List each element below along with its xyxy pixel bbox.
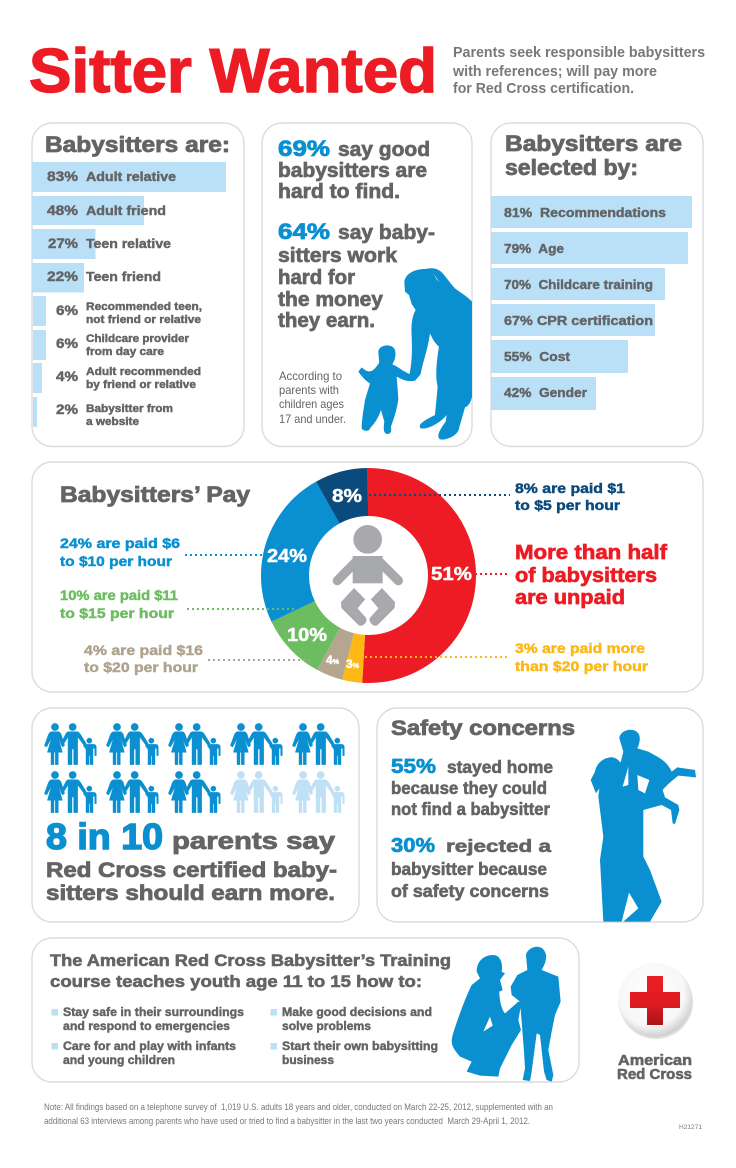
bar chart: babysitter types: not friend or relative bbox=[86, 314, 201, 326]
stat: 64 percent: they earn. bbox=[278, 310, 375, 332]
bar chart: selection criteria: 70% Childcare training bbox=[504, 277, 653, 292]
bar chart: babysitter types: 83% bbox=[47, 169, 78, 184]
subtitle: Parents seek responsible babysitters bbox=[453, 44, 705, 61]
stat: 55 percent: because they could bbox=[391, 778, 547, 798]
label: 8 percent: to $5 per hour bbox=[515, 498, 621, 513]
label: 10 percent: 10% are paid $11 bbox=[60, 588, 179, 603]
connector lines bbox=[185, 495, 510, 660]
bar chart: selection criteria: 67% CPR certification bbox=[504, 313, 653, 328]
bar chart: babysitter types bbox=[32, 162, 226, 428]
bar chart: selection criteria: 55% Cost bbox=[504, 349, 571, 364]
bar chart: babysitter types: 6% bbox=[56, 336, 78, 351]
donut labels bbox=[267, 486, 472, 671]
stat: 64 percent: 64% bbox=[278, 219, 330, 244]
note: according to parents: children ages bbox=[279, 397, 344, 411]
stat: 69 percent bbox=[278, 136, 430, 203]
label: 3 percent bbox=[515, 641, 649, 674]
stat: 69 percent: 69% bbox=[278, 136, 330, 161]
label: 10 percent bbox=[60, 588, 179, 621]
stat: 69 percent: hard to find. bbox=[278, 181, 400, 203]
label: more than half unpaid bbox=[515, 542, 667, 609]
bar chart: babysitter types: 22% bbox=[47, 269, 78, 284]
pictogram: families bbox=[44, 723, 344, 813]
stat: 30 percent: 30% bbox=[391, 835, 435, 857]
stat: 30 percent: rejected a bbox=[446, 836, 551, 856]
panel: 8 in 10 parents bbox=[32, 708, 359, 922]
bullet: good decisions: Make good decisions and bbox=[282, 1005, 432, 1019]
panel: selected by bbox=[491, 123, 703, 446]
label: 4 percent bbox=[84, 643, 204, 675]
footnote: additional 63 interviews among parents who have used or tried to find a babysitter in the last two years conducted March 29-April 1, 2012. bbox=[44, 1116, 530, 1126]
stat: 8 in 10: sitters should earn more. bbox=[46, 881, 335, 905]
heading: training course: course teaches youth age 11 to 15 how to: bbox=[50, 972, 422, 991]
donut labels: 4% bbox=[326, 653, 340, 667]
heading: training course bbox=[50, 951, 451, 991]
donut labels: 10% bbox=[287, 625, 327, 645]
stat: 55 percent bbox=[391, 756, 553, 819]
stat: 30 percent: of safety concerns bbox=[391, 881, 549, 901]
bullet: care for infants: and young children bbox=[63, 1053, 175, 1067]
job code: H21271 bbox=[679, 1124, 702, 1131]
bullet: stay safe: Stay safe in their surroundings bbox=[63, 1005, 244, 1019]
heading: selected by: selected by: bbox=[505, 155, 638, 180]
note: according to parents: 17 and under. bbox=[279, 412, 346, 426]
logo wordmark: American bbox=[618, 1052, 692, 1069]
bar chart: selection criteria: 81% Recommendations bbox=[504, 205, 666, 220]
label: 3 percent: than $20 per hour bbox=[515, 659, 649, 674]
bullet: own business: Start their own babysitting bbox=[282, 1039, 438, 1053]
stat: 64 percent: the money bbox=[278, 289, 384, 311]
bar chart: babysitter types: 6% bbox=[56, 303, 78, 318]
bar chart: selection criteria bbox=[491, 196, 692, 410]
label: 8 percent bbox=[515, 481, 626, 513]
stat: 64 percent: hard for bbox=[278, 267, 355, 289]
stat: 69 percent: babysitters are bbox=[278, 160, 427, 182]
donut chart: pay distribution bbox=[285, 492, 452, 659]
stat: 30 percent bbox=[391, 835, 551, 901]
panel: hard to find bbox=[262, 123, 472, 446]
bar chart: selection criteria: 79% Age bbox=[504, 241, 564, 256]
label: 3 percent: 3% are paid more bbox=[515, 641, 646, 656]
heading: selected by: Babysitters are bbox=[505, 131, 682, 156]
bullet: stay safe bbox=[52, 1005, 244, 1033]
heading: pay: Babysitters’ Pay bbox=[60, 482, 251, 507]
bullet: good decisions: solve problems bbox=[282, 1019, 371, 1033]
heading: selected by bbox=[505, 131, 682, 180]
bar chart: babysitter types: Recommended teen, bbox=[86, 301, 202, 313]
stat: 55 percent: 55% bbox=[391, 756, 436, 778]
label: more than half unpaid: of babysitters bbox=[515, 565, 657, 587]
bar chart: babysitter types: 4% bbox=[56, 369, 78, 384]
logo: American Red Cross bbox=[617, 963, 693, 1083]
note: according to parents: parents with bbox=[279, 383, 339, 397]
bar chart: babysitter types: Adult friend bbox=[86, 203, 166, 218]
stat: 30 percent: babysitter because bbox=[391, 859, 547, 879]
label: 24 percent: to $10 per hour bbox=[60, 554, 173, 569]
note: according to parents: According to bbox=[279, 369, 342, 383]
footnote bbox=[44, 1102, 553, 1126]
logo wordmark: Red Cross bbox=[617, 1066, 692, 1083]
stat: 64 percent bbox=[278, 219, 435, 332]
label: more than half unpaid: are unpaid bbox=[515, 587, 625, 609]
panel: safety concerns bbox=[377, 708, 703, 922]
icon: parent lifting child bbox=[591, 730, 696, 922]
footnote: Note: All findings based on a telephone survey of 1,019 U.S. adults 18 years and older, conducted on March 22-25, 2012, supplemented with an bbox=[44, 1102, 553, 1112]
bullet: stay safe: and respond to emergencies bbox=[63, 1019, 230, 1033]
bar chart: selection criteria: 42% Gender bbox=[504, 385, 587, 400]
bullet: care for infants bbox=[52, 1039, 236, 1067]
panel: training course bbox=[32, 938, 579, 1082]
label: more than half unpaid: More than half bbox=[515, 542, 667, 564]
bar chart: babysitter types: 27% bbox=[48, 236, 78, 251]
label: 4 percent: to $20 per hour bbox=[84, 660, 199, 675]
bullet: good decisions bbox=[270, 1005, 432, 1033]
panel: babysitters are bbox=[32, 123, 244, 446]
donut labels: 51% bbox=[431, 564, 472, 584]
logo button bbox=[618, 963, 693, 1039]
subtitle: with references; will pay more bbox=[452, 63, 657, 80]
stat: 69 percent: say good bbox=[338, 139, 430, 161]
bullet: own business: business bbox=[282, 1053, 334, 1067]
subtitle bbox=[452, 44, 705, 97]
bar chart: babysitter types: 2% bbox=[56, 402, 78, 417]
bullet: care for infants: Care for and play with infants bbox=[63, 1039, 236, 1053]
title: Sitter Wanted bbox=[29, 37, 437, 106]
donut labels: 8% bbox=[332, 486, 362, 506]
bar chart: babysitter types: 48% bbox=[47, 203, 78, 218]
bar chart: babysitter types: Adult relative bbox=[86, 169, 176, 184]
note: according to parents bbox=[279, 369, 346, 426]
label: 4 percent: 4% are paid $16 bbox=[84, 643, 204, 658]
icon: baby bbox=[337, 525, 398, 625]
bar chart: babysitter types: Adult recommended bbox=[86, 366, 201, 378]
stat: 8 in 10: 8 in 10 bbox=[46, 816, 163, 857]
heading: babysitters are: Babysitters are: bbox=[45, 132, 230, 157]
stat: 8 in 10: Red Cross certified baby- bbox=[46, 858, 337, 882]
bar chart: babysitter types: Teen relative bbox=[86, 236, 171, 251]
bar chart: babysitter types: Childcare provider bbox=[86, 333, 190, 345]
stat: 64 percent: sitters work bbox=[278, 245, 398, 267]
stat: 64 percent: say baby- bbox=[338, 222, 435, 244]
bar chart: babysitter types: from day care bbox=[86, 346, 164, 358]
logo wordmark bbox=[617, 1052, 692, 1083]
stat: 8 in 10 bbox=[46, 816, 337, 905]
label: 24 percent: 24% are paid $6 bbox=[60, 536, 181, 551]
donut labels: 24% bbox=[267, 546, 307, 566]
bar chart: babysitter types: by friend or relative bbox=[86, 379, 196, 391]
heading: safety concerns: Safety concerns bbox=[391, 716, 575, 740]
bar chart: babysitter types: Babysitter from bbox=[86, 403, 173, 415]
icon: woman holding toddler's hand bbox=[358, 268, 472, 440]
heading: training course: The American Red Cross Babysitter’s Training bbox=[50, 951, 451, 970]
panel: babysitters' pay bbox=[32, 462, 703, 692]
stat: 8 in 10: parents say bbox=[172, 828, 336, 855]
label: 24 percent bbox=[60, 536, 181, 569]
bar chart: babysitter types: Teen friend bbox=[86, 269, 161, 284]
donut labels: 3% bbox=[346, 657, 360, 671]
bar chart: babysitter types: a website bbox=[86, 416, 139, 428]
label: 10 percent: to $15 per hour bbox=[60, 606, 175, 621]
icon: woman crouching with child bbox=[452, 947, 561, 1082]
bullet: own business bbox=[270, 1039, 438, 1067]
stat: 55 percent: stayed home bbox=[447, 757, 553, 777]
label: 8 percent: 8% are paid $1 bbox=[515, 481, 626, 496]
stat: 55 percent: not find a babysitter bbox=[391, 799, 550, 819]
subtitle: for Red Cross certification. bbox=[453, 80, 634, 97]
